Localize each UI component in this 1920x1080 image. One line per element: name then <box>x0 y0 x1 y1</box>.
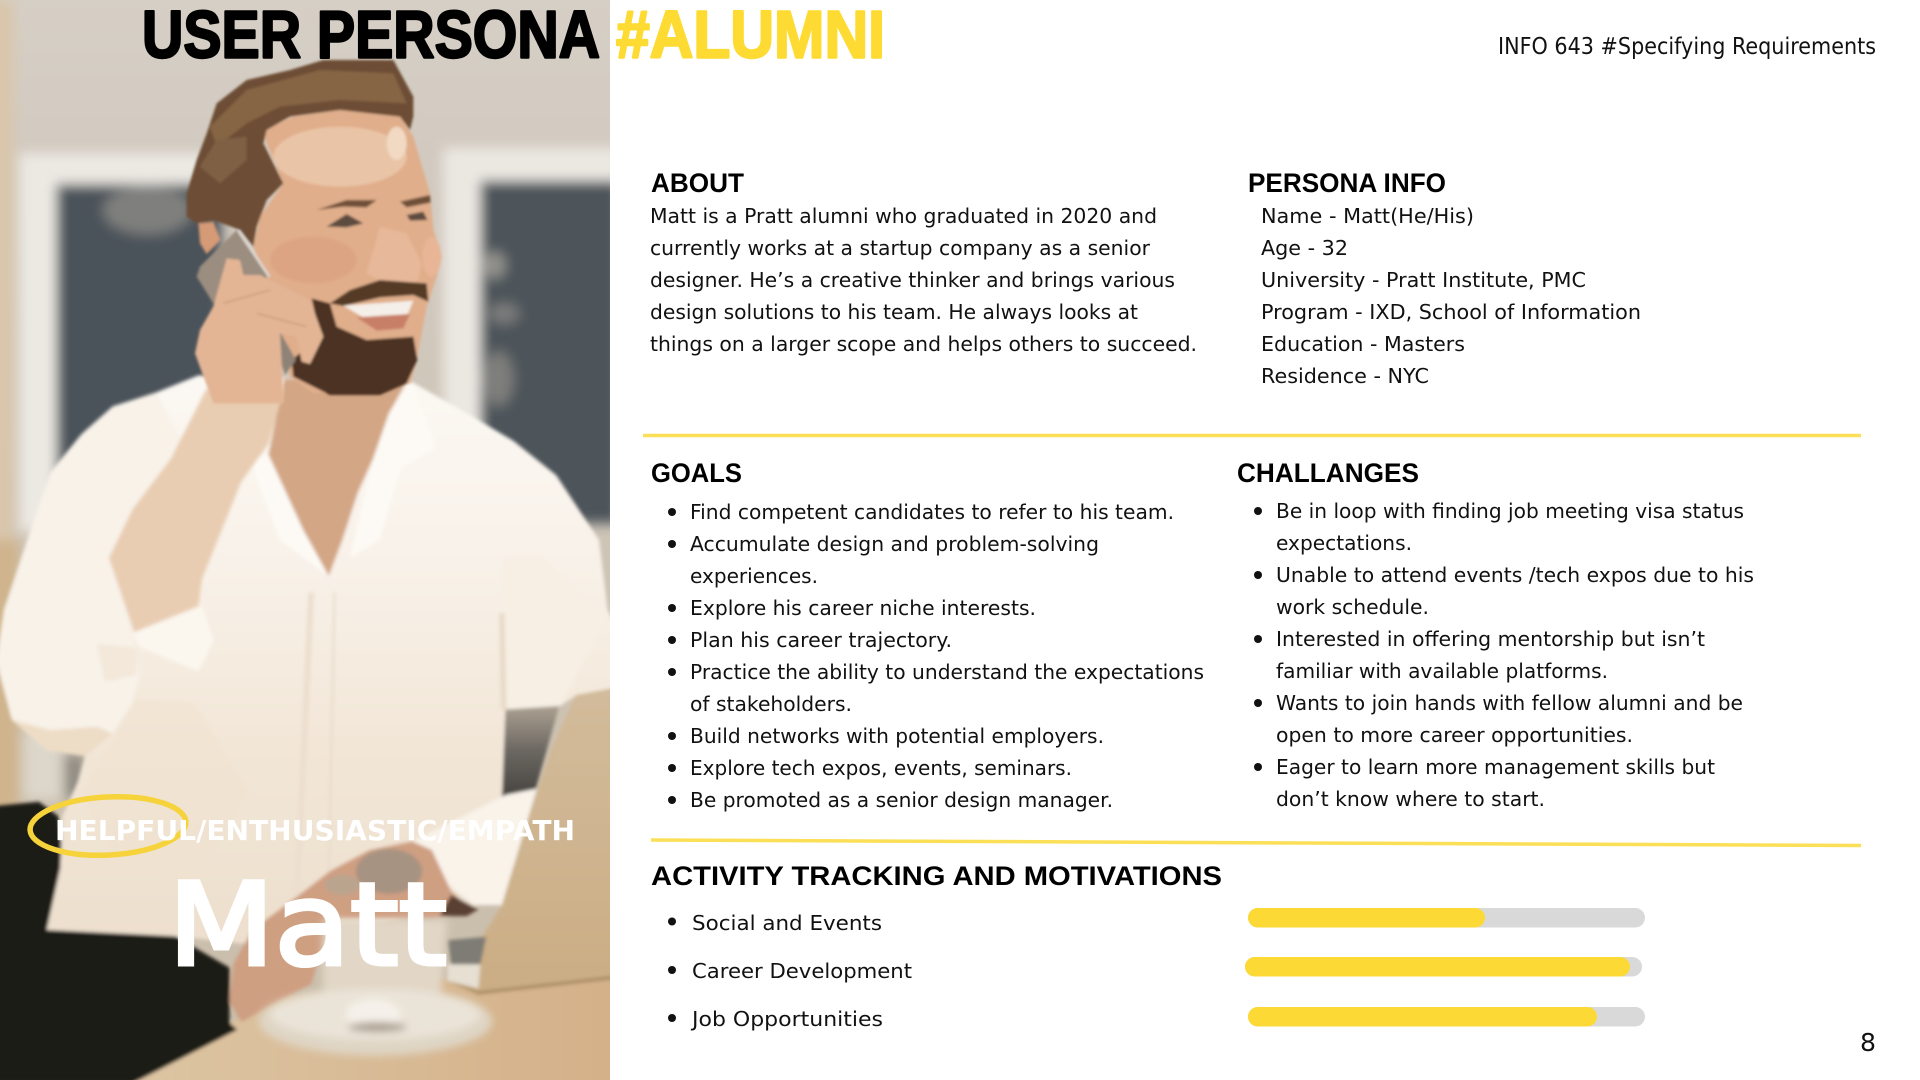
dark gap <box>488 703 560 799</box>
ear <box>198 222 221 254</box>
panel: portrait photo of Matt <box>0 0 622 1080</box>
bar chart: activity levels <box>1245 908 1645 1026</box>
panel: about: currently works at a startup company as a senior <box>650 236 1151 260</box>
panel: challenges: Be in loop with finding job meeting visa status <box>1276 499 1744 523</box>
panel: persona info <box>1248 168 1641 388</box>
page number: 8 <box>1860 1028 1876 1057</box>
panel: challenges: don’t know where to start. <box>1276 787 1545 811</box>
panel: goals: Accumulate design and problem-solving <box>690 532 1099 556</box>
heading: about: ABOUT <box>651 168 744 198</box>
panel: about: design solutions to his team. He always looks at <box>650 300 1138 324</box>
panel: persona info: Education - Masters <box>1261 332 1465 356</box>
neck and chest <box>268 379 408 576</box>
heading: activity tracking: ACTIVITY TRACKING AND MOTIVATIONS <box>651 861 1222 891</box>
panel: challenges: Wants to join hands with fellow alumni and be <box>1276 691 1743 715</box>
chair and trousers <box>0 802 237 1080</box>
hair <box>187 60 413 247</box>
panel: challenges: expectations. <box>1276 531 1412 555</box>
panel: goals: of stakeholders. <box>690 692 852 716</box>
laptop <box>478 687 610 990</box>
panel: challenges: open to more career opportunities. <box>1276 723 1633 747</box>
beard <box>292 298 417 395</box>
phone hand <box>195 258 323 403</box>
panel: challenges: Eager to learn more management skills but <box>1276 755 1715 779</box>
face <box>253 110 442 393</box>
course label: INFO 643 #Specifying Requirements <box>1498 34 1876 60</box>
heading: goals: GOALS <box>651 458 742 488</box>
persona name: Matt <box>168 858 447 992</box>
panel: persona info: University - Pratt Institute, PMC <box>1261 268 1586 292</box>
heading: challenges: CHALLANGES <box>1237 458 1419 488</box>
panel: challenges: Interested in offering mentorship but isn’t <box>1276 627 1705 651</box>
panel: persona info: Name - Matt(He/His) <box>1261 204 1474 228</box>
panel: activity tracking and motivations <box>651 861 1645 1031</box>
panel: goals <box>651 458 1204 812</box>
panel: goals: Find competent candidates to refer to his team. <box>690 500 1174 524</box>
icon: hand-drawn yellow circle <box>29 793 187 859</box>
phone <box>197 230 268 303</box>
tattooed forearm and hand <box>230 841 475 1022</box>
panel: about: things on a larger scope and helps others to succeed. <box>650 332 1197 356</box>
panel: goals: Build networks with potential employers. <box>690 724 1104 748</box>
panel: challenges: familiar with available platforms. <box>1276 659 1608 683</box>
panel: challenges: Unable to attend events /tech expos due to his <box>1276 563 1754 587</box>
left cuff <box>135 610 212 670</box>
right cuff <box>412 789 537 905</box>
panel: persona info: Program - IXD, School of Information <box>1261 300 1641 324</box>
forearm <box>109 389 284 632</box>
panel: about <box>650 168 1197 356</box>
panel: about: designer. He’s a creative thinker and brings various <box>650 268 1175 292</box>
panel: persona info: Residence - NYC <box>1261 364 1429 388</box>
panel: about: Matt is a Pratt alumni who graduated in 2020 and <box>650 204 1157 228</box>
panel: goals: Explore tech expos, events, seminars. <box>690 756 1072 780</box>
panel: goals: Be promoted as a senior design manager. <box>690 788 1113 812</box>
panel: goals: experiences. <box>690 564 818 588</box>
traits line: HELPFUL/ENTHUSIASTIC/EMPATH <box>55 814 575 847</box>
panel: goals: Plan his career trajectory. <box>690 628 952 652</box>
panel: activity tracking and motivations: Career Development <box>692 959 912 983</box>
panel: activity tracking and motivations: Job Opportunities <box>690 1007 883 1031</box>
panel: activity tracking and motivations: Social and Events <box>692 911 882 935</box>
panel: persona info: Age - 32 <box>1261 236 1348 260</box>
panel: goals: Practice the ability to understand the expectations <box>690 660 1204 684</box>
panel: challenges <box>1237 458 1754 811</box>
panel: challenges: work schedule. <box>1276 595 1429 619</box>
panel: goals: Explore his career niche interests. <box>690 596 1036 620</box>
table <box>128 971 619 1080</box>
heading: persona info: PERSONA INFO <box>1248 168 1446 198</box>
left sleeve <box>0 397 156 733</box>
torso <box>27 375 619 944</box>
